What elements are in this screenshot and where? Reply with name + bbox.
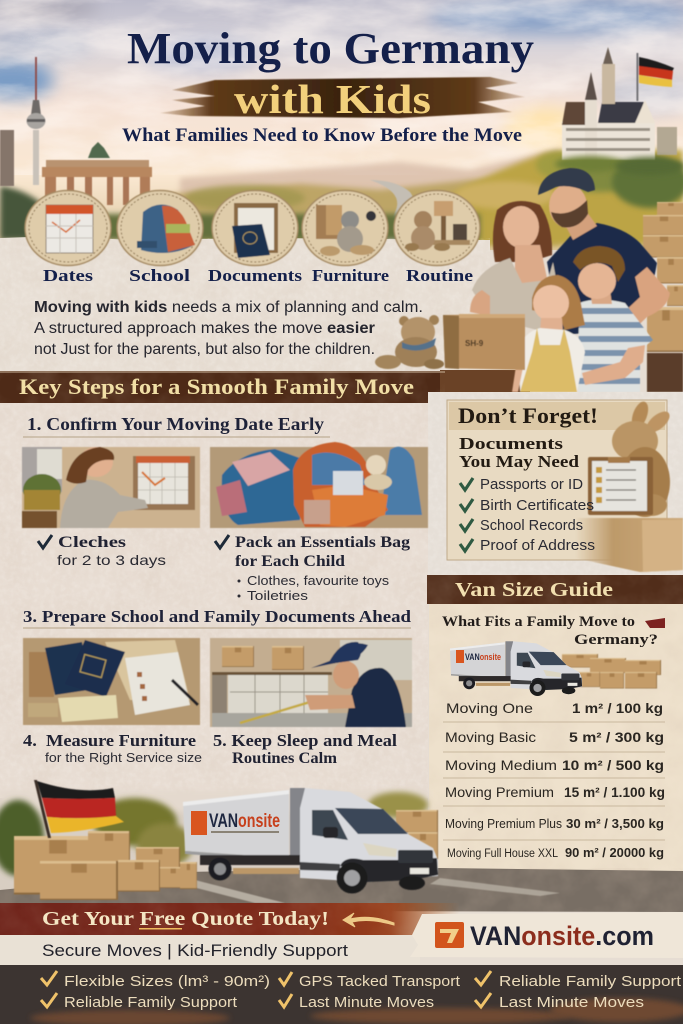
illustration: clipboard [588,457,653,515]
checklist [460,476,595,554]
check marks [41,971,491,1007]
size table: Moving Full House XXL [447,848,559,860]
size table [443,700,665,860]
question: Germany? [574,632,658,648]
logo strip [410,912,683,958]
checklist: Passports or ID [480,476,583,493]
boy [573,246,653,392]
mother [470,201,560,332]
small van logo [456,650,464,663]
step 2 content: essentials bag: for Each Child [235,553,345,570]
label: Dates: Dates [43,266,93,285]
panel: don't forget: You May Need [459,452,580,471]
question: What Fits a Family Move to [442,614,635,630]
photo: essentials backpacks [210,442,428,528]
photo: measuring furniture [210,638,412,727]
step 5 text: Routines Calm [232,750,338,767]
intro text: not Just for the parents, but also for the children. [34,341,375,358]
boxes behind small van [562,654,661,688]
step 5 text: 5. Keep Sleep and Meal [213,731,397,750]
benefit list: Reliable Family Support [64,994,238,1011]
benefit list: Flexible Sizes (lm³ - 90m²) [64,973,270,990]
front moving box: SH-9 [465,339,484,348]
icon: documents passport [212,190,298,266]
step 2 content: essentials bag: Pack an Essentials Bag [235,534,410,551]
heading: don't forget: Don’t Forget! [458,403,598,428]
label: School: School [129,266,190,285]
size table: Moving Premium [445,784,554,800]
illustration: plush bunny [612,399,673,517]
heading: van size guide: Van Size Guide [455,579,613,601]
illustration: box [575,518,683,572]
header band [427,575,683,604]
size table: Moving One [446,700,533,716]
intro text: A structured approach makes the move easier [34,320,375,337]
benefit list: Last Minute Moves [299,994,434,1011]
icon: small flag [645,618,665,628]
illustration: small van [450,641,582,696]
brush stroke behind subtitle [160,77,525,118]
arrow [343,913,394,927]
benefit list [64,973,682,1011]
illustration: castle and German flag [562,47,677,160]
subheading: documents you may need: Documents [459,434,563,453]
panel: don't forget [447,399,683,572]
subtitle: What Families Need to Know Before the Move [122,125,522,146]
call to action band [0,903,683,966]
size table: 90 m² / 20000 kg [565,845,664,860]
size table: 15 m² / 1.100 kg [564,784,665,800]
size table: 10 m² / 500 kg [562,757,664,773]
step 2 content: Cleches [38,534,166,568]
checklist: School Records [480,517,583,534]
illustration: moving boxes [14,831,197,900]
step 5 text [213,731,397,767]
step 2 content: essentials bag [215,534,410,603]
illustration: large van [183,788,438,894]
title: Moving to Germany [127,24,534,73]
illustration: Berlin TV tower [0,57,46,186]
paper panel: intro area [0,236,490,372]
footer: benefits [0,965,683,1024]
stacked boxes beside family [643,202,683,392]
illustration: Brandenburg Gate [42,142,152,205]
step 1 heading: 1. Confirm Your Moving Date Early [27,414,324,434]
illustration: teddy bear [375,315,444,369]
checklist: Proof of Address [480,537,595,554]
illustration: German flag [34,780,124,838]
label: Routine: Routine [406,266,474,285]
check icon [215,535,229,548]
hills and sky [0,790,438,908]
reassurance strip: Secure Moves | Kid-Friendly Support [42,941,348,960]
size table: Moving Medium [445,757,557,773]
background: sky and landscape [0,0,683,250]
illustration: small van: VANonsite [465,652,501,662]
photo: passports and documents [23,638,200,725]
icon: dates calendar [25,190,111,266]
step 4 text: for the Right Service size [45,751,202,765]
step 3 heading: 3. Prepare School and Family Documents Ahead [23,607,412,626]
front moving box [443,314,525,370]
reassurance strip [0,935,420,966]
size table: 1 m² / 100 kg [572,700,663,716]
illustration: family [443,168,670,392]
icon: routine teddy [394,190,480,266]
check icon [38,535,52,548]
banner: key steps [0,370,530,403]
intro text: Moving with kids needs a mix of planning and calm. [34,299,423,316]
boxes behind van [396,810,438,859]
icon: furniture teddy [302,190,388,266]
label: Documents: Documents [208,266,302,285]
size table: Moving Premium Plus [445,817,562,831]
benefit list: Reliable Family Support [499,973,682,990]
benefit list: GPS Tacked Transport [299,973,461,990]
title [122,24,534,146]
checklist: Birth Certificates [480,497,594,514]
red banner [0,903,460,936]
photo: parent marking calendar [22,447,200,528]
benefit list: Last Minute Moves [499,994,644,1011]
van logo [191,811,207,835]
step 2 content: Cleches: for 2 to 3 days [57,552,166,568]
road [0,868,683,912]
icon: school backpack [117,190,203,266]
girl [512,275,585,392]
panel: van size guide [427,575,683,871]
logo wordmark: VANonsite.com [470,921,654,951]
intro text [34,299,423,358]
scene: road and van [0,780,683,912]
panel: main steps paper [0,392,683,803]
step 4 text [23,731,202,765]
question [442,614,658,648]
size table: Moving Basic [445,729,536,745]
step 2 content: Cleches: Cleches [58,534,126,551]
icon row: topics [25,190,480,285]
quote heading: Get Your Free Quote Today! [42,908,329,930]
label: Furniture: Furniture [312,266,389,285]
green treetops below castle [555,156,683,175]
logo icon [435,922,464,948]
father [538,168,670,347]
step 2 content: essentials bag: Clothes, favourite toys [247,574,389,588]
size table: 5 m² / 300 kg [569,729,664,745]
illustration: large van: VANonsite [209,811,280,832]
heading: with Kids: with Kids [234,76,431,122]
step 2 content: essentials bag: Toiletries [247,589,308,603]
step 4 text: 4. Measure Furniture [23,731,196,750]
underline [139,928,182,930]
size table: 30 m² / 3,500 kg [566,816,664,831]
banner heading: Key Steps for a Smooth Family Move [19,374,414,399]
